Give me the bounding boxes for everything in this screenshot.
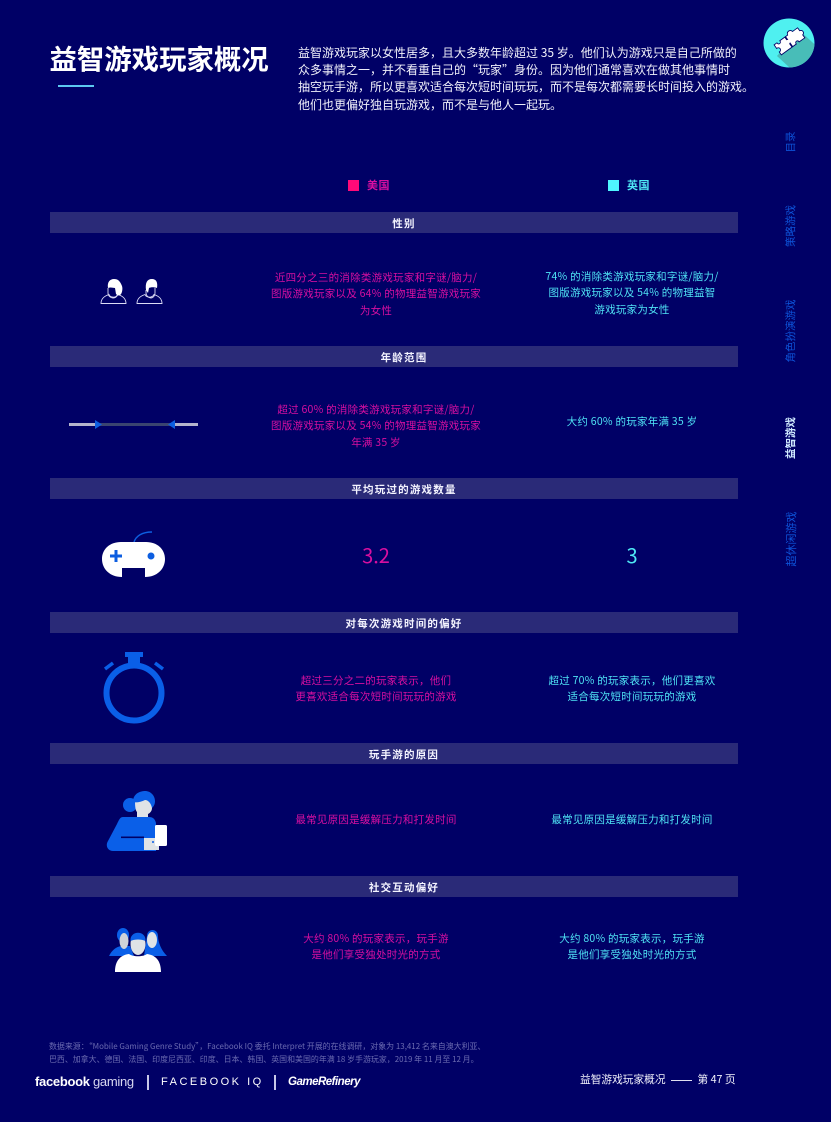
US gender text: 图版游戏玩家以及 64% 的物理益智游戏玩家	[271, 286, 481, 301]
section heading: social preference: 社交互动偏好	[369, 880, 439, 895]
logo: Facebook IQ: FACEBOOK IQ	[161, 1076, 264, 1088]
intro paragraph: 益智游戏玩家以女性居多，且大多数年龄超过 35 岁。他们认为游戏只是自己所做的	[298, 44, 737, 60]
section heading: social preference	[50, 876, 738, 897]
US gender text: 近四分之三的消除类游戏玩家和字谜/脑力/	[275, 270, 477, 285]
title: 益智游戏玩家概况	[50, 37, 269, 77]
US session text: 超过三分之二的玩家表示，他们	[301, 673, 451, 688]
section heading: gender	[50, 212, 738, 233]
UK session text	[548, 673, 716, 704]
UK age text: 大约 60% 的玩家年满 35 岁	[567, 414, 697, 429]
nav item: role-playing: 角色扮演游戏	[783, 300, 798, 362]
UK gender text	[545, 269, 719, 317]
UK reason text: 最常见原因是缓解压力和打发时间	[551, 812, 713, 827]
UK gender text: 游戏玩家为女性	[594, 302, 670, 317]
section heading: average games played	[50, 478, 738, 499]
logo: GameRefinery: GameRefinery	[288, 1076, 360, 1088]
legend: UK: 英国	[627, 177, 650, 193]
nav item: contents: 目录	[783, 132, 798, 152]
US average games value: 3.2	[362, 540, 390, 569]
UK gender text: 74% 的消除类游戏玩家和字谜/脑力/	[545, 269, 719, 284]
intro paragraph	[298, 44, 754, 113]
section heading: session length preference	[50, 612, 738, 633]
icon: female and male player	[100, 279, 162, 304]
legend: US	[348, 177, 390, 193]
section heading: age range	[50, 346, 738, 367]
section heading: average games played: 平均玩过的游戏数量	[351, 482, 457, 497]
side navigation	[783, 132, 799, 566]
logo: facebook gaming: facebook gaming	[35, 1074, 134, 1089]
US age text	[271, 402, 481, 450]
intro paragraph: 抽空玩手游，所以更喜欢适合每次短时间玩玩，而不是每次都需要长时间投入的游戏。	[298, 78, 754, 95]
US reason text: 最常见原因是缓解压力和打发时间	[295, 812, 457, 827]
US age text: 年满 35 岁	[351, 435, 401, 450]
icon: age range slider	[69, 420, 198, 429]
UK gender text: 图版游戏玩家以及 54% 的物理益智	[548, 285, 716, 300]
nav item: strategy: 策略游戏	[783, 205, 798, 247]
section heading: reasons for playing	[50, 743, 738, 764]
UK social text: 大约 80% 的玩家表示，玩手游	[559, 931, 705, 946]
legend: UK	[608, 177, 650, 193]
source note: 数据来源：“Mobile Gaming Genre Study”，Facebook IQ 委托 Interpret 开展的在线调研，对象为 13,412 名来自澳大利亚、	[49, 1041, 485, 1052]
icon: person with phone	[106, 791, 167, 851]
US social text: 大约 80% 的玩家表示，玩手游	[303, 931, 449, 946]
title underline accent	[58, 85, 94, 86]
nav item: puzzle (active): 益智游戏	[783, 417, 798, 459]
section heading: session length preference: 对每次游戏时间的偏好	[346, 616, 462, 631]
icon: puzzle badge	[764, 18, 814, 68]
icon: game controller	[102, 531, 165, 577]
legend: US: 美国	[367, 177, 390, 193]
US social text	[303, 931, 449, 962]
icon: group of three people	[109, 928, 167, 972]
US gender text	[271, 270, 481, 318]
US session text	[295, 673, 457, 704]
section heading: reasons for playing: 玩手游的原因	[369, 747, 439, 762]
US age text: 超过 60% 的消除类游戏玩家和字谜/脑力/	[277, 402, 475, 417]
nav item: hyper casual: 超休闲游戏	[783, 511, 799, 566]
US gender text: 为女性	[360, 303, 392, 318]
intro paragraph: 他们也更偏好独自玩游戏，而不是与他人一起玩。	[298, 96, 562, 113]
footer page marker: 益智游戏玩家概况 第 47 页	[580, 1072, 736, 1087]
UK social text	[559, 931, 705, 962]
UK session text: 超过 70% 的玩家表示，他们更喜欢	[548, 673, 716, 688]
source note	[49, 1041, 485, 1065]
US social text: 是他们享受独处时光的方式	[312, 947, 440, 962]
logos row	[35, 1074, 361, 1090]
icon: stopwatch	[104, 652, 164, 724]
US age text: 图版游戏玩家以及 54% 的物理益智游戏玩家	[271, 418, 481, 433]
UK average games value: 3	[626, 540, 638, 569]
UK social text: 是他们享受独处时光的方式	[568, 947, 696, 962]
section heading: age range: 年龄范围	[381, 350, 427, 365]
UK session text: 适合每次短时间玩玩的游戏	[568, 689, 696, 704]
source note: 巴西、加拿大、德国、法国、印度尼西亚、印度、日本、韩国、英国和美国的年满 18 岁手游玩家，2019 年 11 月至 12 月。	[49, 1054, 479, 1065]
intro paragraph: 众多事情之一，并不看重自己的“玩家”身份。因为他们通常喜欢在做其他事情时	[298, 61, 730, 78]
section heading: gender: 性别	[392, 216, 416, 231]
US session text: 更喜欢适合每次短时间玩玩的游戏	[295, 689, 457, 704]
